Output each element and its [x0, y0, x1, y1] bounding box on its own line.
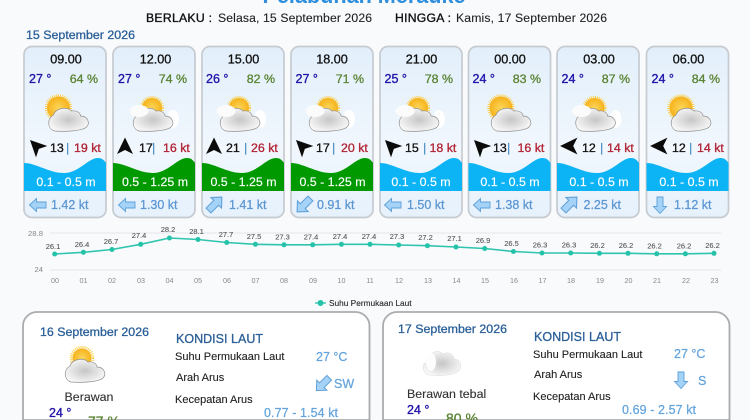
panel: 16 September: 27 °C: [316, 350, 347, 364]
line chart: sea surface temperature: 02: [108, 276, 116, 285]
icon: heavy cloud: [423, 352, 461, 376]
date heading: 15 September 2026: [26, 28, 135, 42]
panel: 17 September: 0.69 - 2.57 kt: [622, 403, 697, 417]
current: [203, 192, 227, 216]
line chart: sea surface temperature: 26.3: [533, 240, 547, 250]
line chart: sea surface temperature: 27.1: [447, 234, 462, 243]
panel: forecast 21.00: |: [423, 141, 426, 155]
panel: forecast 09.00: [24, 46, 106, 218]
panel: forecast 00.00: 16 kt: [518, 141, 545, 155]
current: [384, 198, 401, 212]
icon: wind arrow: [560, 138, 577, 154]
panel: forecast 03.00: [557, 46, 639, 218]
current: [118, 198, 135, 212]
panel: forecast 15.00: 82 %: [247, 72, 275, 86]
line chart: sea surface temperature: 09: [309, 276, 317, 285]
icon: wind arrow: [24, 134, 47, 157]
sea surface temperature: Suhu Permukaan Laut: [175, 351, 284, 363]
line chart: sea surface temperature: 04: [166, 276, 174, 285]
icon: wind arrow: [117, 138, 133, 154]
line chart: sea surface temperature: 06: [223, 276, 231, 285]
panel: forecast 06.00: 0.1 - 0.5 m: [659, 175, 719, 189]
wave height: [380, 158, 462, 191]
icon: wind arrow: [206, 138, 222, 154]
line chart: sea surface temperature: 05: [194, 276, 202, 285]
line chart: sea surface temperature: 26.4: [75, 240, 89, 249]
panel: forecast 21.00: 18 kt: [430, 141, 457, 155]
line chart: sea surface temperature: 26.9: [476, 236, 490, 245]
validity period: Selasa, 15 September 2026: [218, 11, 372, 25]
panel: forecast 09.00: 19 kt: [74, 141, 101, 155]
chart legend: Suhu Permukaan Laut: [329, 298, 412, 308]
panel: forecast 06.00: 84 %: [692, 72, 720, 86]
panel: 17 September: [383, 312, 730, 420]
panel: forecast 21.00: 25 °: [384, 72, 407, 86]
icon: mostly cloudy: [130, 97, 179, 131]
line chart: sea surface temperature: [28, 225, 721, 285]
panel: forecast 09.00: 27 °: [29, 72, 51, 86]
panel: forecast 03.00: 2.25 kt: [584, 198, 622, 212]
line chart: sea surface temperature: 10: [338, 276, 346, 285]
line chart: sea surface temperature: 26.2: [619, 241, 633, 250]
panel: forecast 09.00: 64 %: [70, 72, 98, 86]
panel: forecast 06.00: 24 °: [652, 72, 674, 86]
wave height: [468, 158, 550, 191]
validity period: HINGGA :: [395, 11, 451, 25]
line chart: sea surface temperature: 27.3: [390, 232, 404, 241]
line chart: sea surface temperature: 28.2: [161, 225, 175, 234]
panel: forecast 18.00: 17: [316, 141, 330, 155]
panel: forecast 12.00: 12.00: [140, 52, 171, 66]
wave height: [291, 158, 373, 191]
condition: Berawan: [65, 390, 114, 404]
panel: forecast 12.00: 0.5 - 1.25 m: [122, 175, 188, 189]
icon: mostly cloudy: [396, 97, 445, 131]
panel: forecast 06.00: 06.00: [673, 52, 704, 66]
panel: forecast 09.00: 13: [50, 141, 64, 155]
current direction: Arah Arus: [534, 369, 583, 381]
panel: forecast 06.00: |: [689, 141, 692, 155]
panel: forecast 15.00: [202, 46, 284, 218]
icon: cloudy with sun: [65, 347, 105, 382]
wave height: [113, 158, 195, 191]
panel: forecast 21.00: 21.00: [406, 52, 437, 66]
panel: forecast 03.00: 24 °: [562, 72, 584, 86]
panel: forecast 12.00: 1.30 kt: [140, 198, 178, 212]
panel: forecast 00.00: 1.38 kt: [495, 198, 533, 212]
line chart: sea surface temperature: 27.7: [219, 230, 233, 239]
panel: forecast 00.00: 13: [493, 141, 507, 155]
panel: forecast 15.00: 26 kt: [251, 141, 278, 155]
line chart: sea surface temperature: 24: [34, 265, 44, 274]
line chart: sea surface temperature: 20: [624, 276, 632, 285]
line chart: sea surface temperature: 03: [137, 276, 145, 285]
panel: forecast 18.00: 0.5 - 1.25 m: [299, 175, 366, 189]
icon: wind arrow: [468, 134, 491, 157]
panel: forecast 21.00: 15: [405, 141, 419, 155]
line chart: sea surface temperature: 17: [538, 276, 546, 285]
panel: forecast 15.00: 26 °: [206, 72, 228, 86]
line chart: sea surface temperature: 27.4: [132, 231, 146, 240]
line chart: sea surface temperature: 27.5: [247, 232, 261, 241]
icon: partly cloudy: [668, 96, 711, 131]
line chart: sea surface temperature: 26.2: [647, 242, 662, 250]
line chart: sea surface temperature: 19: [596, 276, 604, 285]
line chart: sea surface temperature: 08: [280, 276, 288, 285]
panel: forecast 18.00: 20 kt: [341, 141, 368, 155]
panel: forecast 21.00: 0.1 - 0.5 m: [391, 175, 451, 189]
line chart: sea surface temperature: 18: [567, 276, 575, 285]
panel: forecast 03.00: 03.00: [583, 52, 615, 66]
current: [558, 192, 582, 216]
current speed: Kecepatan Arus: [175, 394, 253, 406]
panel: forecast 00.00: 24 °: [472, 72, 495, 86]
line chart: sea surface temperature: 13: [424, 276, 432, 285]
sea condition heading: KONDISI LAUT: [534, 330, 621, 344]
panel: forecast 15.00: 1.41 kt: [229, 198, 267, 212]
line chart: sea surface temperature: 11: [366, 276, 374, 285]
panel: forecast 06.00: 14 kt: [697, 141, 724, 155]
line chart: sea surface temperature: 27.4: [304, 232, 318, 242]
date: 17 September 2026: [398, 322, 507, 336]
panel: forecast 03.00: |: [600, 141, 603, 155]
icon: partly cloudy: [488, 96, 531, 131]
panel: forecast 12.00: |: [152, 141, 155, 155]
panel: forecast 06.00: 1.12 kt: [674, 198, 712, 212]
panel: forecast 15.00: 0.5 - 1.25 m: [210, 175, 277, 189]
line chart: sea surface temperature: 26.2: [677, 242, 691, 250]
panel: forecast 00.00: |: [507, 141, 510, 155]
icon: partly cloudy: [46, 96, 88, 131]
panel: forecast 12.00: [113, 46, 195, 218]
line chart: sea surface temperature: 28.1: [189, 227, 204, 236]
panel: forecast 12.00: 16 kt: [163, 141, 190, 155]
panel: forecast 12.00: 27 °: [118, 72, 140, 86]
wave height: [646, 158, 728, 191]
panel: forecast 21.00: [379, 46, 462, 218]
panel: forecast 18.00: 27 °: [296, 72, 318, 86]
panel: 16 September: SW: [334, 377, 354, 391]
panel: forecast 18.00: 0.91 kt: [317, 198, 355, 212]
date: 16 September 2026: [40, 325, 149, 339]
panel: forecast 00.00: 00.00: [494, 52, 526, 66]
line chart: sea surface temperature: 00: [51, 276, 59, 285]
panel: 16 September: [23, 312, 370, 420]
panel: forecast 21.00: 1.50 kt: [407, 198, 445, 212]
panel: forecast 18.00: 18.00: [316, 52, 348, 66]
panel: 16 September: 0.77 - 1.54 kt: [264, 406, 339, 420]
sea condition heading: KONDISI LAUT: [176, 332, 263, 346]
panel: forecast 09.00: 1.42 kt: [51, 198, 89, 212]
line chart: sea surface temperature: 12: [395, 276, 403, 285]
validity period: Kamis, 17 September 2026: [456, 11, 607, 25]
panel: forecast 03.00: 14 kt: [607, 141, 634, 155]
temperature: 24 °: [407, 403, 429, 417]
panel: forecast 18.00: |: [332, 141, 335, 155]
panel: forecast 18.00: 71 %: [336, 72, 364, 86]
current: [474, 198, 490, 212]
line chart: sea surface temperature: 07: [252, 276, 260, 285]
panel: forecast 09.00: 09.00: [50, 52, 82, 66]
current: [30, 198, 46, 212]
current direction: Arah Arus: [176, 372, 225, 384]
panel: 17 September: 27 °C: [674, 347, 705, 361]
line chart: sea surface temperature: 27.4: [333, 232, 347, 241]
condition: Berawan tebal: [407, 387, 486, 401]
icon: mostly cloudy: [306, 97, 355, 131]
panel: 17 September: S: [698, 374, 706, 388]
sea surface temperature: Suhu Permukaan Laut: [533, 349, 642, 361]
line chart: sea surface temperature: 26.2: [705, 241, 720, 250]
icon: mostly cloudy: [572, 97, 622, 131]
line chart: sea surface temperature: 28.8: [28, 229, 43, 238]
line chart: sea surface temperature: 26.5: [504, 239, 519, 248]
line chart: sea surface temperature: 16: [510, 276, 518, 285]
panel: forecast 03.00: 0.1 - 0.5 m: [569, 175, 629, 189]
icon: wind arrow: [290, 134, 313, 157]
panel: forecast 00.00: 0.1 - 0.5 m: [480, 175, 540, 189]
line chart: sea surface temperature: 01: [80, 276, 88, 285]
line chart: sea surface temperature: 22: [682, 276, 690, 285]
line chart: sea surface temperature: 26.3: [562, 240, 576, 250]
panel: forecast 00.00: [468, 46, 550, 218]
panel: forecast 09.00: |: [66, 141, 69, 155]
temperature: 24 °: [49, 406, 71, 420]
line chart: sea surface temperature: 21: [653, 276, 661, 285]
line chart: sea surface temperature: 27.4: [362, 232, 376, 241]
panel: forecast 03.00: 12: [582, 141, 596, 155]
panel: forecast 03.00: 87 %: [602, 72, 630, 86]
panel: forecast 06.00: [646, 46, 728, 218]
icon: wind arrow: [650, 138, 667, 154]
panel: forecast 15.00: 15.00: [228, 52, 259, 66]
validity period: BERLAKU :: [146, 11, 212, 25]
current: [292, 193, 316, 217]
wave height: [557, 158, 639, 191]
line chart: sea surface temperature: 26.2: [590, 241, 605, 250]
line chart: sea surface temperature: 14: [452, 276, 460, 285]
panel: forecast 15.00: 21: [226, 141, 240, 155]
panel: forecast 09.00: 0.1 - 0.5 m: [36, 175, 96, 189]
line chart: sea surface temperature: 27.2: [418, 233, 433, 242]
panel: forecast 21.00: 78 %: [425, 72, 453, 86]
panel: forecast 06.00: 12: [672, 141, 686, 155]
panel: forecast 15.00: |: [244, 141, 247, 155]
line chart: sea surface temperature: 27.3: [275, 232, 290, 242]
panel: forecast 12.00: 17: [139, 141, 153, 155]
icon: wind arrow: [379, 134, 402, 157]
wave height: [24, 158, 106, 191]
icon: mostly cloudy: [216, 97, 266, 131]
validity period: [146, 11, 607, 25]
panel: forecast 18.00: [290, 46, 373, 218]
wave height: [202, 158, 284, 191]
line chart: sea surface temperature: 15: [481, 276, 489, 285]
current: [654, 197, 666, 214]
line chart: sea surface temperature: 23: [710, 276, 718, 285]
current speed: Kecepatan Arus: [533, 391, 611, 403]
line chart: sea surface temperature: 26.1: [46, 242, 60, 251]
panel: forecast 12.00: 74 %: [159, 72, 187, 86]
line chart: sea surface temperature: 26.7: [104, 237, 118, 246]
panel: forecast 00.00: 83 %: [513, 72, 541, 86]
